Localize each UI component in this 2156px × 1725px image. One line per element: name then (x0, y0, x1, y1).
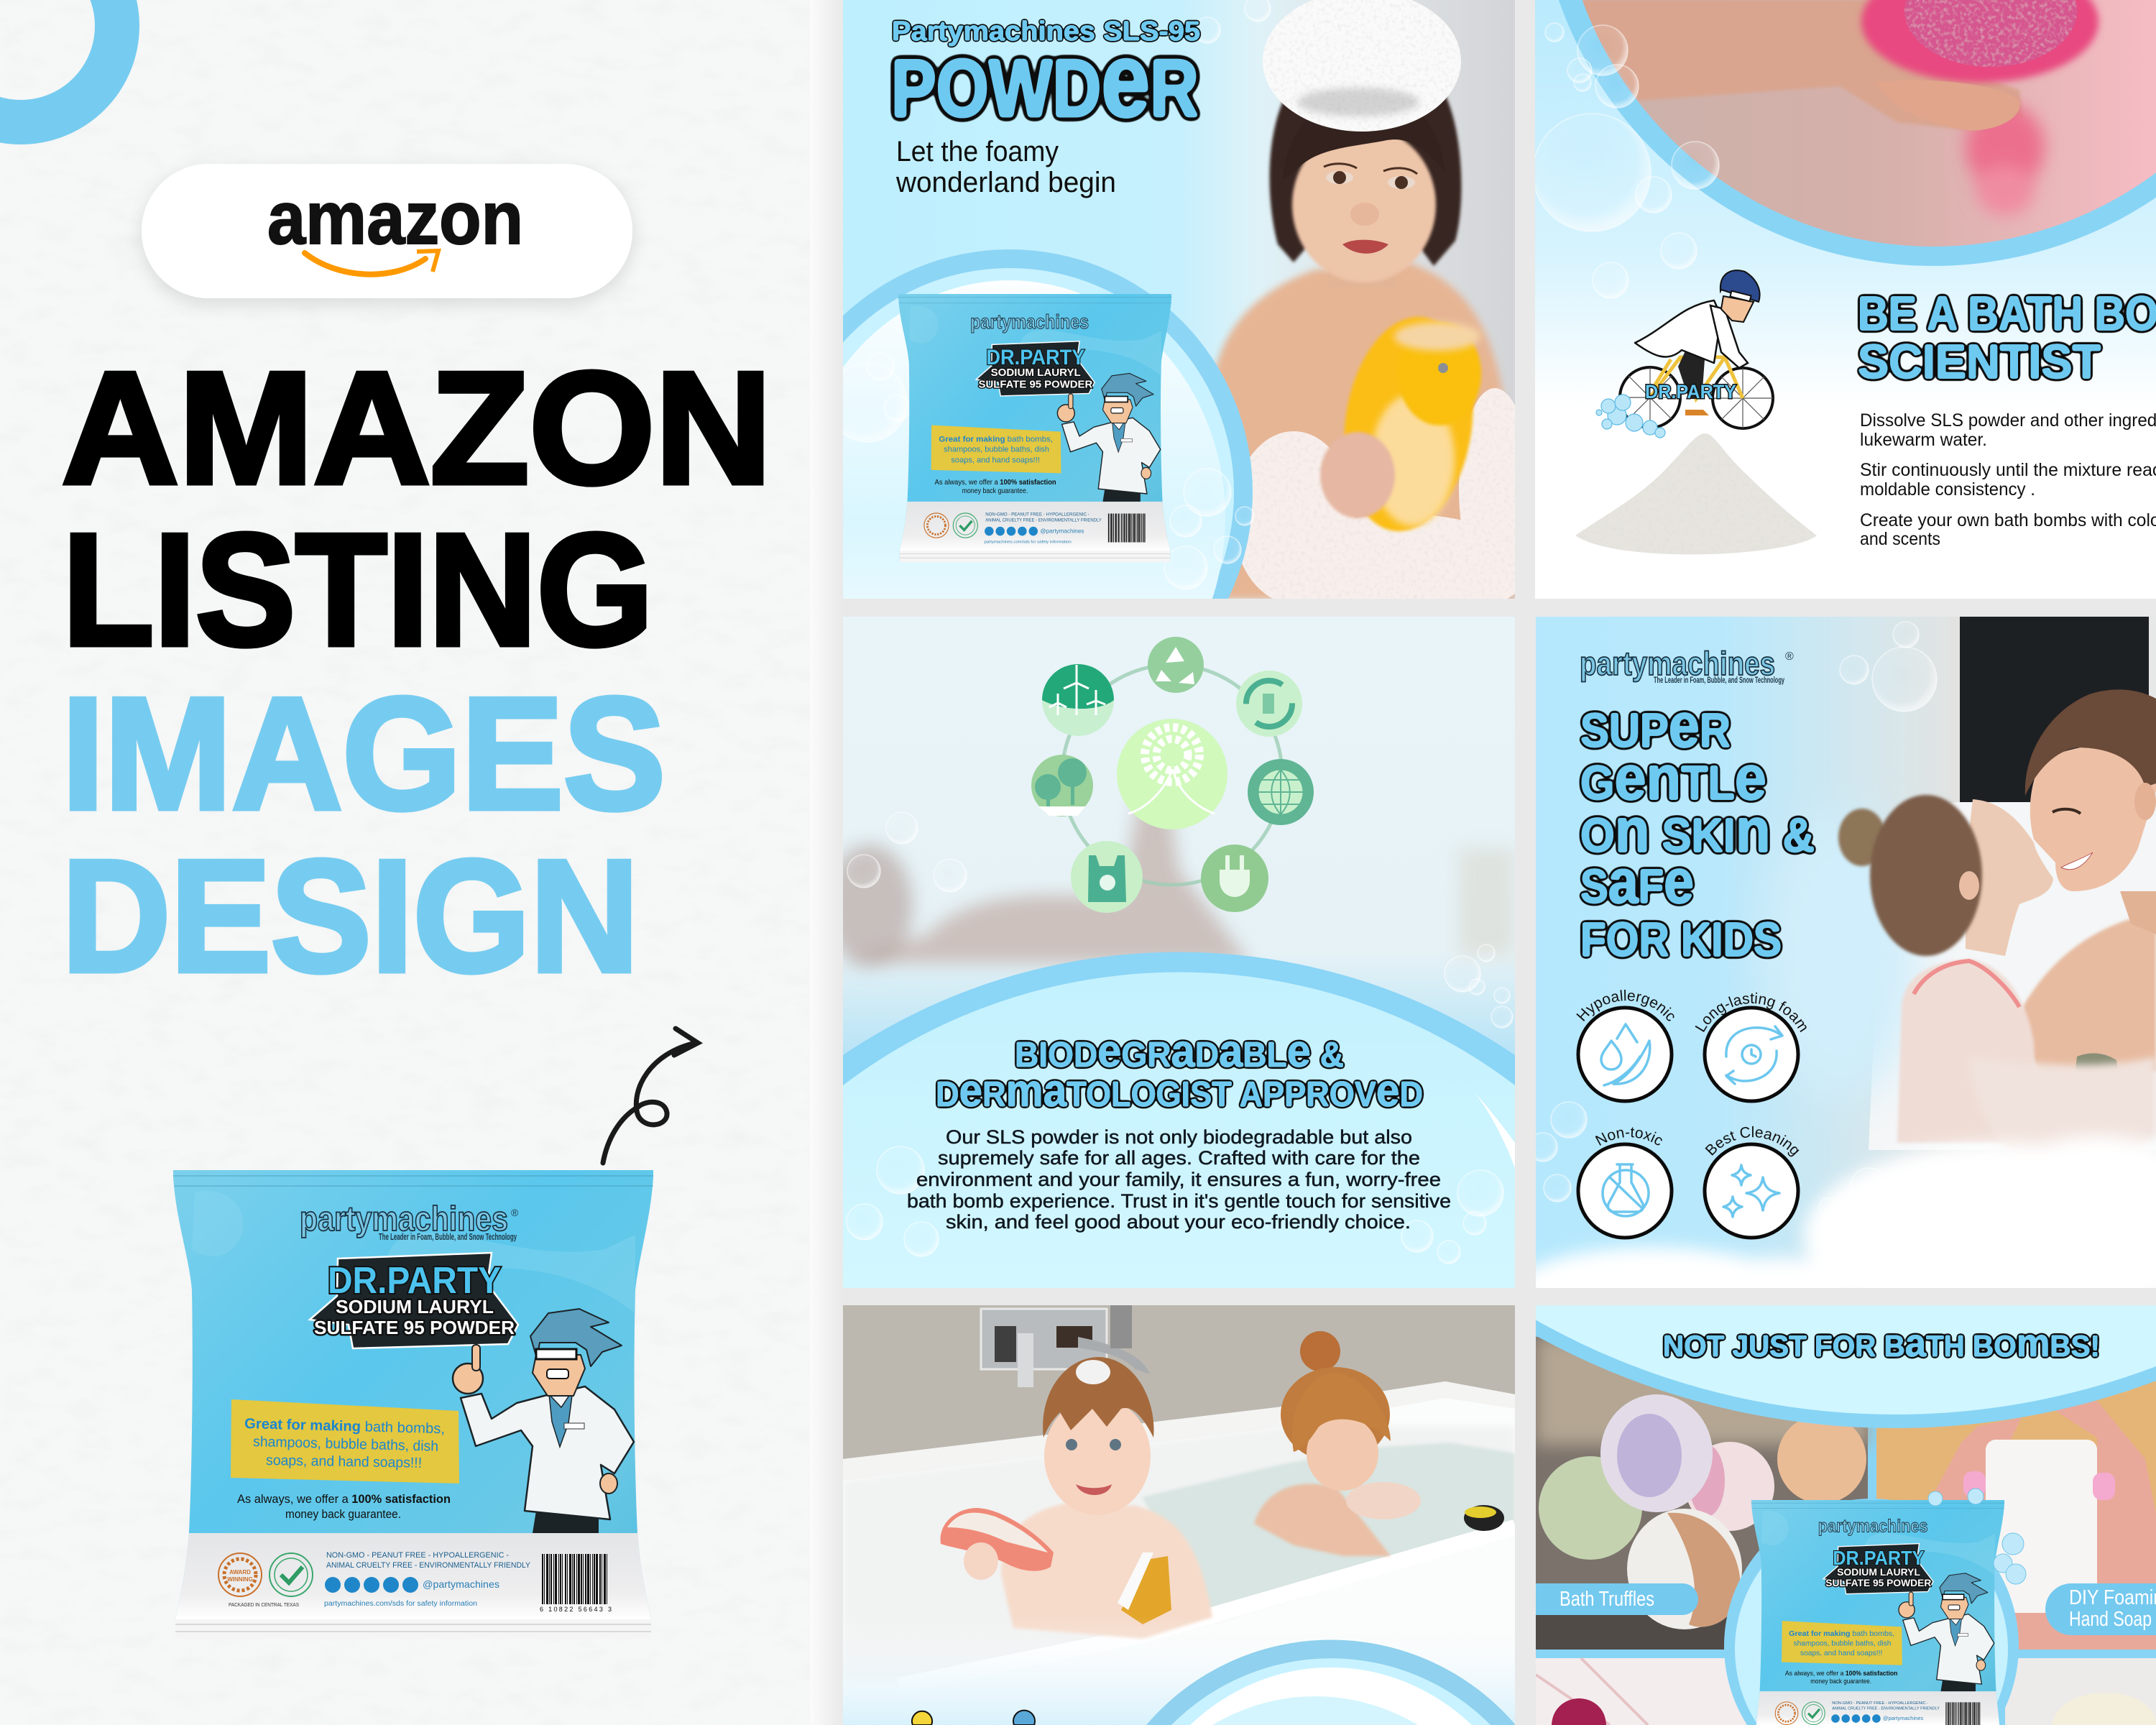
icon: hypoallergenic: Hypoallergenic (1576, 990, 1674, 1021)
product bag (898, 294, 1171, 562)
instructions: and scents (1860, 529, 1940, 549)
tagline: wonderland begin (895, 167, 1116, 198)
decorative ring (0, 0, 117, 122)
headline: IMAGES (62, 665, 665, 843)
product bag hero: ANIMAL CRUELTY FREE - ENVIRONMENTALLY FRIENDLY (326, 1561, 531, 1570)
product bag hero: Great for making bath bombs, (244, 1416, 445, 1437)
heading: Partymachines SLS-95: Partymachines SLS-95 (892, 17, 1200, 47)
heading: biodegradable (936, 1026, 1423, 1116)
heading: super gentle: SaFe (1580, 847, 1694, 916)
headline (62, 339, 772, 1006)
product bag hero: PACKAGED IN CENTRAL TEXAS (229, 1603, 299, 1608)
body copy (907, 1126, 1451, 1233)
label: DIY foaming hand soap (2045, 1583, 2156, 1635)
product bag: partymachines.com/sds for safety information (984, 540, 1072, 545)
panel: bath bomb scientist (1533, 0, 2156, 599)
photo: child with duck (1210, 0, 1531, 622)
product bag: @partymachines (1883, 1715, 1924, 1721)
illustration: powder pile (1575, 433, 1817, 554)
product bag hero: WINNING (227, 1576, 253, 1583)
tagline: Let the foamy (896, 136, 1059, 167)
heading: POWDER: POWDeR (891, 21, 1199, 139)
icon: wind turbines (1042, 664, 1114, 736)
product bag hero: 6 10822 56643 3 (540, 1606, 612, 1613)
panel: biodegradable (826, 617, 1515, 1288)
icon: best cleaning: Best Cleaning (1705, 1126, 1800, 1157)
soap bubbles (847, 812, 1513, 1264)
icon: tree (1117, 719, 1227, 829)
mother (2022, 689, 2156, 1092)
photo: bath truffles (1536, 1337, 1868, 1650)
product bag: NON-GMO - PEANUT FREE - HYPOALLERGENIC - (1832, 1701, 1928, 1706)
heading: biodegradable: BIODeGRaDaBLe & (1015, 1026, 1344, 1077)
body copy: skin, and feel good about your eco-friendly choice. (946, 1211, 1411, 1233)
boy (941, 1357, 1212, 1639)
product bag hero: ® (511, 1207, 519, 1218)
body copy: supremely safe for all ages. Crafted with care for the (938, 1147, 1420, 1169)
product bag hero: AWARD (229, 1569, 251, 1576)
instructions: moldable consistency . (1860, 479, 2035, 500)
instructions (1860, 410, 2156, 549)
heading: super gentle: FOR KIDS (1580, 913, 1782, 967)
product bag hero: NON-GMO - PEANUT FREE - HYPOALLERGENIC - (326, 1551, 509, 1560)
product bag hero: soaps, and hand soaps!!! (266, 1453, 422, 1471)
product bag: As always, we offer a 100% satisfaction (1785, 1670, 1897, 1677)
heading: be a bath bomb scientist (1858, 287, 2156, 389)
headline: AMAZON (62, 339, 772, 518)
icon: hypoallergenic (1576, 990, 1674, 1103)
arc with inner swoosh (843, 249, 1253, 599)
heading: super gentle: On SKIn & (1580, 796, 1815, 865)
product bag: money back guarantee. (962, 487, 1028, 495)
amazon logo pill: amazon (267, 177, 523, 260)
panel: not just for bath bombs (1151, 0, 2156, 1725)
product bag hero: shampoos, bubble baths, dish (253, 1434, 438, 1455)
product bag hero: DR.PARTY (328, 1260, 501, 1302)
tagline (895, 136, 1116, 198)
arc (1146, 1640, 1516, 1725)
product bag: SODIUM LAURYL (1837, 1567, 1920, 1578)
product bag hero: money back guarantee. (285, 1507, 401, 1521)
circle behind bag (1724, 1499, 2019, 1725)
product bag: soaps, and hand soaps!!! (1800, 1649, 1882, 1657)
product bag: Great for making bath bombs, (939, 435, 1053, 443)
headline: DESIGN (62, 827, 639, 1006)
panel: kids in bathtub (843, 1305, 1516, 1725)
label: bath truffles (1536, 1583, 1698, 1615)
product bag: money back guarantee. (1810, 1678, 1871, 1685)
body copy: bath bomb experience. Trust in it's gentle touch for sensitive (907, 1190, 1451, 1212)
soap bubbles (1533, 23, 1719, 298)
heading: super gentle: GenTLe (1580, 743, 1766, 813)
eco icon ring (1031, 637, 1314, 913)
body copy: environment and your family, it ensures a fun, worry-free (916, 1169, 1441, 1190)
body copy: Our SLS powder is not only biodegradable but also (946, 1126, 1412, 1148)
daughter (1838, 795, 2053, 1143)
icon: plug (1201, 845, 1268, 912)
illustration: doctor on bicycle (1596, 270, 1773, 438)
product bag: shampoos, bubble baths, dish (944, 446, 1049, 454)
label: bath truffles: Bath Truffles (1560, 1588, 1654, 1611)
product bag hero: As always, we offer a 100% satisfaction (237, 1492, 451, 1506)
photo: bathtub scene (843, 1305, 1515, 1725)
product bag hero: The Leader in Foam, Bubble, and Snow Technology (379, 1231, 517, 1242)
product bag: DR.PARTY (1833, 1547, 1924, 1569)
product bag: SULFATE 95 POWDER (1825, 1578, 1931, 1588)
icon: recycle (1148, 637, 1204, 693)
icon: recycled bag (1071, 841, 1143, 913)
arrow (603, 1029, 698, 1163)
girl (1254, 1331, 1421, 1556)
product bag: partymachines (970, 310, 1089, 333)
product bag (1751, 1500, 2004, 1725)
soap bubbles (1529, 622, 1962, 1269)
soap bubbles (828, 0, 1271, 589)
product bag hero (173, 1170, 653, 1639)
product bag: As always, we offer a 100% satisfaction (935, 479, 1056, 487)
icon: battery cycle (1236, 671, 1302, 737)
logo: partymachines (1580, 645, 1775, 682)
heading: be a bath bomb scientist: SCIENTIST (1858, 335, 2101, 389)
heading: super gentle (1580, 691, 1815, 967)
panel: left cover (0, 0, 810, 1725)
heading: biodegradable: DeRmaTOLOGIST APPROVeD (936, 1065, 1423, 1116)
photo: mother and daughter (1761, 617, 2156, 1170)
photo: blurred hand (826, 791, 1515, 967)
product bag hero: partymachines.com/sds for safety information (324, 1600, 477, 1608)
product bag hero: partymachines (300, 1200, 508, 1238)
product bag: @partymachines (1040, 528, 1084, 534)
heading: super gentle: SUPeR (1580, 691, 1731, 760)
icon: non-toxic (1577, 1127, 1673, 1239)
product bag: ANIMAL CRUELTY FREE - ENVIRONMENTALLY FRIENDLY (1832, 1706, 1940, 1711)
product bag: partymachines (1818, 1516, 1928, 1536)
product bag: soaps, and hand soaps!!! (951, 456, 1040, 465)
faucet (981, 1305, 1150, 1387)
product bag: shampoos, bubble baths, dish (1793, 1639, 1892, 1647)
icon: trees (1031, 755, 1093, 816)
header arc (1151, 0, 2156, 1428)
icon: non-toxic: Non-toxic (1595, 1127, 1662, 1146)
product bag: SULFATE 95 POWDER (979, 379, 1093, 390)
icon: globe (1248, 759, 1314, 825)
foam cloud (1516, 1136, 2156, 1330)
icon: best cleaning (1700, 1124, 1805, 1238)
illustration: doctor on bicycle: DR.PARTY (1645, 381, 1736, 402)
panel: powder hero with child (843, 0, 1515, 599)
icon: long-lasting foam (1695, 992, 1807, 1103)
logo: The Leader in Foam, Bubble, and Snow Technology (1654, 675, 1784, 685)
instructions: lukewarm water. (1860, 430, 1987, 450)
product bag: SODIUM LAURYL (991, 367, 1081, 379)
product bag: NON-GMO - PEANUT FREE - HYPOALLERGENIC - (985, 512, 1089, 517)
photo circle: bath bomb in hand (1537, 0, 2156, 266)
headline: LISTING (63, 501, 653, 679)
soap bubbles (1928, 1489, 2026, 1584)
product bag: ANIMAL CRUELTY FREE - ENVIRONMENTALLY FRIENDLY (985, 518, 1102, 523)
icon: long-lasting foam: Long-lasting foam (1695, 992, 1807, 1032)
product bag: Great for making bath bombs, (1789, 1629, 1894, 1638)
product bag hero: SODIUM LAURYL (336, 1296, 494, 1317)
product bag: DR.PARTY (986, 346, 1085, 369)
amazon logo pill (142, 164, 632, 298)
photo: marble and flower (1536, 1658, 2156, 1725)
product bag hero: SULFATE 95 POWDER (314, 1317, 515, 1338)
panel: super gentle (1536, 617, 2156, 1288)
photo: hand soap (1876, 1337, 2156, 1650)
logo: ® (1785, 650, 1794, 663)
illustration tips: rubber duck (912, 1711, 1035, 1725)
arc (843, 952, 1515, 1288)
product bag hero: @partymachines (423, 1578, 499, 1590)
heading: not just for bath bombs: NOT JUST FOR BaTH BOmBS! (1663, 1321, 2100, 1365)
